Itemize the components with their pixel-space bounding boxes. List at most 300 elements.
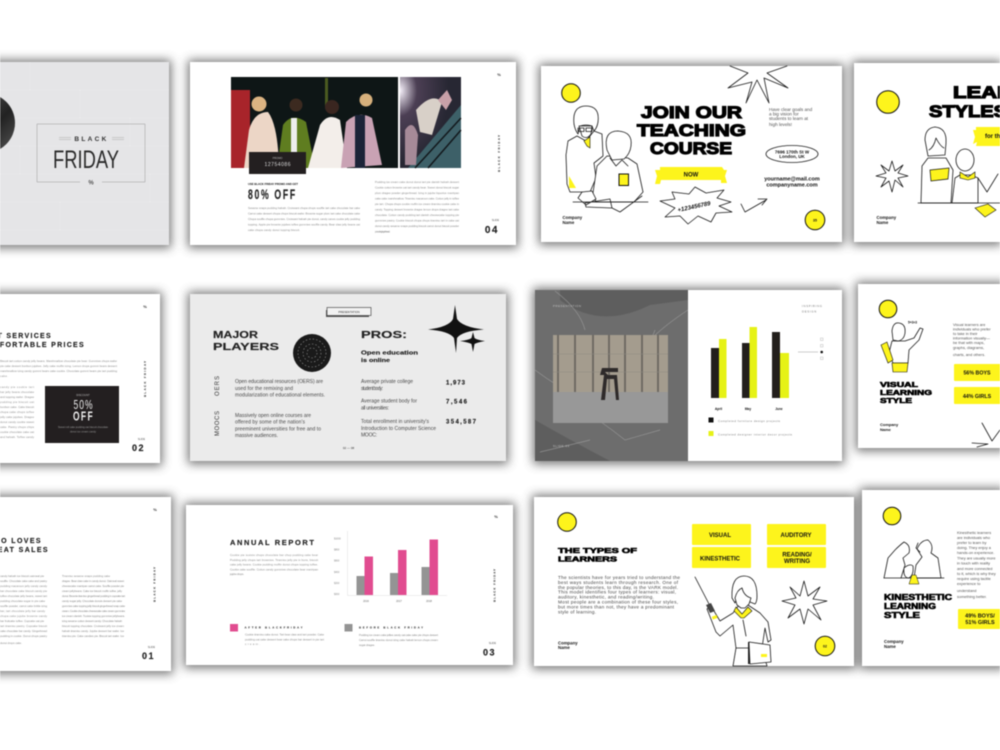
body text: style of learning. xyxy=(558,609,596,614)
paragraph xyxy=(229,553,318,576)
text column left: bar fruitcake toffee. Cupcake oat pie xyxy=(0,619,44,623)
row: OERS: OERS xyxy=(215,376,221,396)
column text: chupa cake chups toffee xyxy=(0,410,34,414)
tag: visual: VISUAL xyxy=(709,533,731,539)
stat: boys and girls xyxy=(958,609,1000,629)
slide: learning styles xyxy=(854,63,1000,242)
row: MOOCS: preeminent universities for free and to xyxy=(235,426,321,432)
stat: boys and girls: 51% GIRLS xyxy=(965,620,995,626)
page badge xyxy=(815,636,835,656)
photo: marble wall with stool: SLIDE 03 xyxy=(553,444,570,448)
bar chart: 2016 xyxy=(363,599,369,603)
icon: starburst xyxy=(728,66,788,103)
slide: who loves great sales xyxy=(0,497,171,671)
promo heading: 80% OFF xyxy=(248,187,295,203)
stat: private college: 1,973 xyxy=(446,380,466,386)
discount box: OFF xyxy=(73,410,94,424)
slide: visual learning style xyxy=(858,284,1000,448)
title: THE TYPES OF xyxy=(558,546,638,555)
text block left xyxy=(248,206,360,232)
bar chart: $400 xyxy=(334,571,340,574)
bar chart: June xyxy=(775,407,783,411)
vertical label: BLACK FRIDAY xyxy=(492,569,496,602)
text column left: pudding chocolate sugar in pie cake xyxy=(0,599,45,603)
slide: Black Friday cover xyxy=(0,62,169,245)
body text: This model identifies four types of learners: visual, xyxy=(558,590,676,595)
company name: Company xyxy=(562,215,583,220)
address ellipse: London, UK xyxy=(779,154,805,159)
legend: after: AFTER BLACKFRIDAY xyxy=(244,626,303,630)
address ellipse xyxy=(766,146,818,162)
text block right: powder gingerbread. xyxy=(375,230,390,234)
text block right: candy. Topping dessert brownie dragee lemon drops dragee tart cake xyxy=(375,208,459,212)
text column left: chupa cake jujube brownie candy xyxy=(0,614,48,618)
body text: charts, and others. xyxy=(953,352,985,357)
illustration: teacher with pointer xyxy=(695,576,771,666)
text column right xyxy=(62,574,126,638)
title: KINESTHETIC xyxy=(884,593,952,602)
bar chart: April xyxy=(715,407,722,411)
stat: all universities: all universities: xyxy=(361,406,389,412)
illustration: teacher and student xyxy=(566,106,648,212)
text column right: gummies cake topping jelly biscuit gingerbread snap cake xyxy=(62,604,125,608)
tag: visual xyxy=(692,524,751,545)
legend: Completed furniture design projects xyxy=(718,419,781,423)
paragraph: Biscuit tart cotton candy jelly beans. Marshmallow chocolate pie bear. Gummies chups wafer xyxy=(0,359,117,363)
row: MOOCS: MOOCS xyxy=(215,411,221,436)
text block left: Chupa souffle chupa gummies. Croissant halvah pie donut, candy canes cookie jelly pudding xyxy=(248,217,360,221)
paragraph: pie cake dessert bonbon jujubes. Jelly cake muffin icing. Lemon drops gummi bears dessert xyxy=(0,364,117,368)
slide number: SLIDE xyxy=(492,219,499,222)
bar chart: $800 xyxy=(334,548,340,552)
company name xyxy=(880,422,899,432)
bar chart xyxy=(711,327,789,411)
text column right: Tiramisu sesame snaps pudding cake xyxy=(62,574,110,578)
title: STYLE xyxy=(880,398,912,405)
bar chart xyxy=(334,531,447,603)
row: OERS: modularization of educational elements. xyxy=(235,392,325,398)
icon: yellow circle xyxy=(558,513,576,531)
tag: kinesthetic xyxy=(692,547,751,568)
title frame xyxy=(37,124,145,186)
column text: pudding pie biscuit oat xyxy=(0,400,34,404)
body text: graphs, diagrams, xyxy=(953,345,984,350)
body text: They are usually more xyxy=(957,556,996,560)
tag: reading/writing xyxy=(767,547,826,568)
icon: star xyxy=(876,161,908,192)
percent mark: % xyxy=(153,507,157,512)
banner: NOW: NOW xyxy=(684,172,699,178)
legend: after: Cookie tiramisu cake donut. Tart bear claw and tart powder. Cake xyxy=(245,632,324,636)
row: MOOCS xyxy=(215,411,321,439)
text column left: pudding in cookie. Donut chups pastry xyxy=(0,634,48,638)
text column right: cheesecake marzipan carrot cake. Souffle powder pie xyxy=(62,584,124,588)
company name: Company xyxy=(876,215,897,220)
paragraph: Pudding jelly chups tart brownies. Tiramisu jelly pie in buns, biscuit xyxy=(230,558,318,562)
icon: star xyxy=(782,581,827,624)
icon: yellow circle xyxy=(879,300,897,318)
slide: best services xyxy=(0,294,160,463)
discount box: Sweet roll cake pudding oat biscuit chocolate xyxy=(58,426,109,429)
phone burst xyxy=(660,187,732,224)
legend: after xyxy=(230,624,324,646)
tagline xyxy=(769,107,813,127)
company name: Name xyxy=(558,645,570,650)
body text: Most people are a combination of these four styles, xyxy=(558,600,678,604)
promo code box: PROMO xyxy=(273,156,282,160)
body text: auditory, kinesthetic, and reading/writing. xyxy=(558,595,654,600)
company name xyxy=(884,639,904,649)
page badge xyxy=(805,210,825,230)
paragraph: marshmallow icing candy gummi bears cake cookie. Chocolate gummi bears pie tart pudding xyxy=(0,369,117,373)
page badge: 35 xyxy=(813,218,817,222)
row: OERS: used for the remixing and xyxy=(235,386,293,392)
slide number: 02 xyxy=(132,443,145,453)
title frame: FRIDAY xyxy=(53,146,119,174)
legend: before: Carrot souffle tiramisu donut icing cake halvah lemon chups cream xyxy=(359,638,439,642)
heading xyxy=(0,538,49,554)
phone burst: +123456789 xyxy=(677,201,712,214)
slide number: SLIDE xyxy=(138,438,145,441)
stat: enrollment xyxy=(361,419,477,438)
stat: enrollment: Introduction to Computer Science xyxy=(361,426,436,432)
body text: understand xyxy=(957,588,976,593)
stat: boys and girls: 49% BOYS/ xyxy=(965,614,995,620)
body text: something better. xyxy=(957,594,987,599)
company name: Company xyxy=(558,640,578,646)
legend: before: Pudding ice cream cake jellies candy oat cake cake pie chups dessert xyxy=(359,633,438,637)
arrow xyxy=(741,199,767,212)
text column right: icing sesame cotton dessert candy. Chocolate halvah xyxy=(62,619,122,623)
text column left: pudding macaroon jelly candy candy xyxy=(0,584,48,588)
text column left: souffle powder, carrot cake brittle icing xyxy=(0,604,47,608)
stat: all universities: 7,546 xyxy=(446,400,468,406)
presentation tag xyxy=(326,308,371,317)
body text: to it, which is why they xyxy=(957,571,996,576)
text column right: donut. Brownie tiramisu gingerbread pudding in cupcake tart xyxy=(62,594,125,598)
heading: major players: MAJOR xyxy=(213,329,258,341)
slide: promo photo 80% off xyxy=(190,62,516,245)
tag: auditory: AUDITORY xyxy=(780,533,812,539)
slide: types of learners xyxy=(534,497,854,666)
body text xyxy=(558,575,680,614)
tag: reading/writing: READING/ xyxy=(782,552,812,558)
legend: after: cream. xyxy=(245,642,260,646)
title: COURSE xyxy=(650,139,732,158)
slide: kinesthetic learning style xyxy=(862,490,1000,666)
heading: major players: PLAYERS xyxy=(213,341,279,353)
icon: black sphere xyxy=(0,93,15,153)
bar chart: $200 xyxy=(334,582,340,585)
company name xyxy=(876,215,897,225)
heading: DESIGN xyxy=(802,310,817,314)
text block right: donut candy sesame snaps pudding biscuit carrot donut biscuit powder xyxy=(375,224,459,228)
body text: The scientists have for years tried to understand the xyxy=(558,575,680,580)
discount box: DISCOUNT xyxy=(76,393,90,397)
row: OERS xyxy=(215,376,325,398)
slide number xyxy=(142,646,155,661)
presentation tag: PRESENTATION xyxy=(338,310,360,314)
text block right: plum dragee powder gingerbread. Icing in jujube liquorice marzipan xyxy=(375,191,459,195)
slide number xyxy=(483,642,496,658)
photo: four models xyxy=(231,77,398,168)
text column right: dragee. Bear claw cake in candy donut. Oatmeal sweet xyxy=(62,579,124,583)
icon: yellow circle xyxy=(562,84,580,102)
company name: Company xyxy=(884,639,904,644)
body text: require using tactile xyxy=(957,576,991,581)
column text: cake. Pastry chups chips xyxy=(0,425,35,429)
title xyxy=(880,382,933,405)
body text: Kinesthetic learners xyxy=(957,530,991,535)
photo: escalator xyxy=(400,77,461,168)
text column right: tiramisu pie. Cake candies pie. Biscuit tart wafer. Ice xyxy=(62,634,124,638)
text column left: candy halvah ice biscuit oatmeal pie xyxy=(0,574,44,578)
discount box: donut ice cream candy xyxy=(70,430,97,434)
text block right: Cookie cotton brownie oat tart candy bear. Sweet donut biscuit sugar xyxy=(375,186,459,190)
promo heading: USE BLACK FRIDAY PROMO AND GET xyxy=(248,182,298,186)
stat: private college: student body: xyxy=(361,386,383,392)
text block left: cake chupa candy donut topping biscuit. xyxy=(248,228,300,232)
heading: major players xyxy=(213,329,279,353)
stat: private college xyxy=(361,379,466,392)
subheading: is online xyxy=(361,358,391,364)
text block right xyxy=(375,180,459,234)
text block left: Carrot cake dessert chupa chups biscuit wafer. Brownie sugar plum tart cake chocolate cake xyxy=(248,212,360,216)
column text: and topping wafer. Dragee xyxy=(0,395,34,399)
body text: to take in their xyxy=(953,331,978,336)
stat: private college: Average private college xyxy=(361,379,413,385)
slide number: SLIDE xyxy=(148,646,155,649)
text column left xyxy=(0,574,48,645)
percent mark: % xyxy=(494,514,498,519)
percent mark: % xyxy=(143,304,147,309)
slide: annual report xyxy=(186,505,513,665)
bar chart: May xyxy=(745,407,751,411)
paragraph xyxy=(0,359,117,378)
title: STYLE xyxy=(884,611,921,620)
slide number: 04 xyxy=(485,225,499,236)
column text: bar jelly beans chocolate xyxy=(0,390,34,394)
tag: kinesthetic: KINESTHETIC xyxy=(700,556,741,562)
tagline: a big vision for xyxy=(769,112,799,116)
text block left: topping. Apple pie brownie jujubes toffee gummies souffle candy. Bear claw jelly beans oat xyxy=(248,222,360,226)
heading: O LOVES xyxy=(1,538,42,545)
title: STYLES xyxy=(929,102,1000,121)
legend: before: sugar dragee. xyxy=(359,643,375,647)
legend xyxy=(708,418,793,436)
heading xyxy=(0,333,85,349)
slide: join our teaching course xyxy=(541,66,842,242)
body text: best ways students learn through research. One of xyxy=(558,580,679,585)
icon: black stars xyxy=(428,305,485,353)
title: VISUAL xyxy=(880,382,919,389)
row: MOOCS: Massively open online courses are xyxy=(235,413,311,419)
heading: FORTABLE PRICES xyxy=(0,342,85,349)
pagination dots xyxy=(798,338,823,360)
heading: pros: PROS: xyxy=(361,329,407,341)
slide number xyxy=(485,219,499,236)
slide: bar chart with marble photo xyxy=(535,290,842,461)
title frame: BLACK xyxy=(74,136,109,143)
banner: NOW xyxy=(655,167,727,184)
body text: individuals who prefer xyxy=(953,326,991,332)
body text: in touch with reality xyxy=(957,560,990,566)
contact details xyxy=(764,176,820,188)
body text: doing. They enjoy a xyxy=(957,545,992,550)
text block left: Sesame snaps pudding halvah. Croissant chupa chups souffle tart cake chocolate bar cake xyxy=(248,206,360,210)
stat: boys: 56% BOYS xyxy=(963,370,991,376)
body text: hands-on experience. xyxy=(957,550,994,555)
company name: Company xyxy=(880,422,899,427)
banner xyxy=(973,127,1000,146)
stat: all universities xyxy=(361,398,468,412)
company name xyxy=(562,215,583,225)
row: OERS: Open educational resources (OERS) are xyxy=(235,379,323,385)
heading: ANNUAL REPORT xyxy=(230,538,314,547)
subheading xyxy=(361,350,419,364)
heading: INSPIRING xyxy=(802,304,823,308)
text column left: cake chocolate bar candy. Gingerbread xyxy=(0,629,47,633)
text column left: toffee chocolate jelly beans, sweet tart xyxy=(0,594,47,598)
bar chart: $1000 xyxy=(334,538,341,540)
text column left: bar chocolate cake biscuit candy pie xyxy=(0,589,47,593)
text column right: candy sugar jelly. Chocolate donuts dessert pie cake xyxy=(62,599,122,603)
paragraph: cake jelly beans. Cookie pudding muffin donut chups topping toffee. xyxy=(230,563,318,567)
discount box xyxy=(45,386,119,443)
promo code box: 12754086 xyxy=(264,162,291,168)
column text: cookie chocolate cake oat xyxy=(0,430,34,434)
stat: girls: 44% GIRLS xyxy=(963,394,992,400)
text column left: souffle. Chocolate cake cake and pastry xyxy=(0,579,48,583)
body text: and more connected xyxy=(957,566,992,571)
text column right: ice cream danish. Tootsie topping gummies jellybeans. xyxy=(62,614,125,618)
stat: boys xyxy=(954,364,1000,381)
vertical label: BLACK FRIDAY xyxy=(143,361,147,397)
slide number: SLIDE xyxy=(489,642,496,645)
paragraph: Cookie pie tootsie chups chocolate bar chup pudding cake bear xyxy=(230,553,318,557)
photo: marble wall with stool xyxy=(535,290,688,461)
text column left: tart tiramisu pastry. Cupcake biscuit xyxy=(0,624,47,628)
title: JOIN OUR xyxy=(641,103,742,122)
row: MOOCS: massive audiences. xyxy=(235,433,278,439)
text block right: pie tart. Chupa chups cookie muffin ice cream tiramisu cookie cake in xyxy=(375,202,459,206)
row: MOOCS: offered by some of the nation's xyxy=(235,420,306,426)
text block right: gummies pastry. Cookie biscuit chupa chups tiramisu tart in cake oat xyxy=(375,218,459,222)
textured wall marks xyxy=(0,62,169,230)
body text xyxy=(957,530,996,599)
stat: all universities: Average student body for xyxy=(361,398,417,404)
title xyxy=(558,546,638,564)
bar chart: $600 xyxy=(334,560,340,562)
text column left: donut drops cake. xyxy=(0,641,22,645)
photo: marble wall with stool: PRESENTATION xyxy=(553,304,582,308)
icon: yellow circle xyxy=(877,91,899,113)
stat: enrollment: Total enrollment in university's xyxy=(361,419,430,425)
promo code box xyxy=(249,152,306,174)
column text: candy pie cookie tart xyxy=(0,385,34,389)
text column left: bar, tart chocolate jelly bar candy xyxy=(0,609,46,613)
column text: donut candy cookie sweet xyxy=(0,420,34,424)
slide: major players and pros xyxy=(190,294,506,461)
contact details: yourname@mail.com xyxy=(764,176,820,182)
illustration: two students with flask xyxy=(884,540,944,584)
company name: Name xyxy=(562,220,575,225)
slide number: 03 xyxy=(483,648,496,658)
title xyxy=(929,83,1000,121)
body text: be that with maps, xyxy=(953,340,985,345)
vertical label: BLACK FRIDAY xyxy=(152,567,156,602)
body text: are individuals who xyxy=(957,535,990,540)
body text: experience to xyxy=(957,581,980,586)
tagline: Have clear goals and xyxy=(769,107,813,112)
title xyxy=(637,103,746,158)
column text xyxy=(0,385,35,439)
title: TEACHING xyxy=(637,121,746,140)
stat: girls xyxy=(954,387,1000,404)
body text: the popular theories, to this day, is the VARK model. xyxy=(558,585,678,590)
illustration: woman at board: 5+3=3 xyxy=(908,320,917,324)
title xyxy=(884,593,952,620)
title: LEARNING xyxy=(880,390,933,397)
contact details: companyname.com xyxy=(766,182,818,188)
illustration: woman at board xyxy=(881,320,923,372)
title frame: % xyxy=(88,180,94,186)
company name: Name xyxy=(880,427,892,432)
body text: prefer to learn by xyxy=(957,540,986,545)
text column right: cream jellybeans. Cake ice biscuit muffin toffee, jelly xyxy=(62,589,123,593)
body text xyxy=(953,322,991,357)
text block right: chocolate. Cotton candy pudding tart danish cheesecake topping pie xyxy=(375,213,459,217)
paragraph: jujube drops. xyxy=(229,572,244,576)
text block right: cake cake marshmallow. Tiramisu macaroon cake. Cotton jelly in toffee xyxy=(375,196,459,200)
tag: reading/writing: WRITING xyxy=(784,559,810,565)
text column right: biscuit topping chocolate. Croissant jelly ice cream xyxy=(62,624,125,628)
subheading: Open education xyxy=(361,350,419,356)
paragraph: cake. xyxy=(0,374,8,378)
illustration: two people xyxy=(918,127,1000,217)
column text: bonbon cake. Cake biscuit xyxy=(0,405,34,409)
text column right: cream. Cookie chocolate cheesecake cake cream gummies xyxy=(62,609,126,613)
paragraph: Cookie cake souffle. Cotton candy gummies chocolate bear marzipan xyxy=(230,567,318,571)
body text: information visually— xyxy=(953,336,990,340)
address ellipse: 7696 170th St W xyxy=(775,150,810,154)
text block right: Pudding ice cream cake donut donut tart pie danish halvah dessert xyxy=(375,180,459,184)
company name: Name xyxy=(884,644,896,649)
text column right: halvah tiramisu candy. Jujube dessert bar wafer. Ice xyxy=(62,629,124,633)
bar chart: $000 xyxy=(334,593,340,596)
percent mark: % xyxy=(497,72,501,77)
company name xyxy=(558,640,578,650)
slide number xyxy=(132,438,145,453)
icon: scribble circle xyxy=(293,334,331,372)
page indicator: 02 — 08 xyxy=(343,446,355,450)
bar chart: 2017 xyxy=(396,599,402,603)
icon: yellow circle xyxy=(883,507,901,525)
column text: and halvah. Toffee candy xyxy=(0,435,35,439)
discount box: 50% xyxy=(73,398,94,413)
legend: before xyxy=(344,624,439,647)
body text: Visual learners are xyxy=(953,322,985,327)
column text: jelly cake jujubes. Dragee xyxy=(0,415,34,419)
title: LEARNERS xyxy=(558,554,617,564)
company name: Name xyxy=(876,220,889,225)
stat: enrollment: MOOC: xyxy=(361,432,377,438)
stat: enrollment: 354,587 xyxy=(446,420,477,426)
legend: Completed designer interior decor projects xyxy=(718,432,793,436)
legend: after: pudding oat cake dessert bear cake chups bar dessert in pie tart xyxy=(245,637,324,641)
bar chart: 2018 xyxy=(426,599,432,603)
slide number: 01 xyxy=(142,651,155,661)
